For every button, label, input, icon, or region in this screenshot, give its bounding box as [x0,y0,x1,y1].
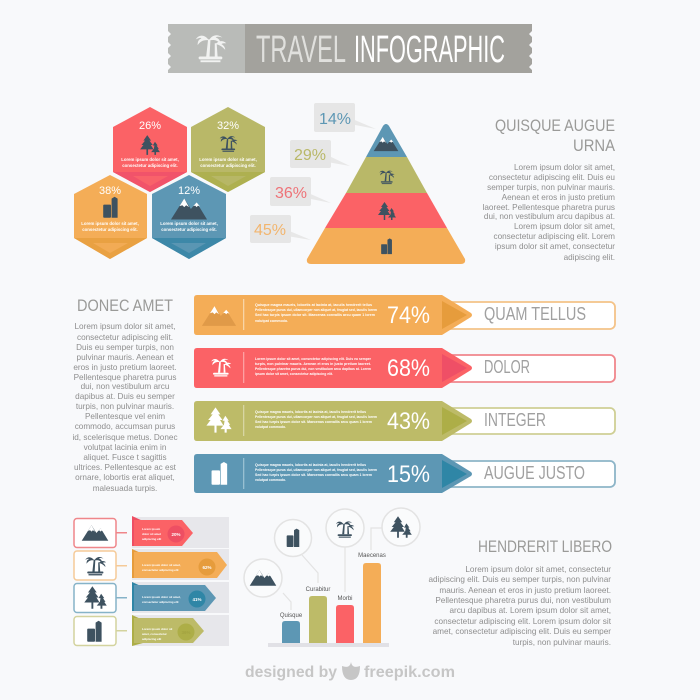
bar: orange 74% Quam Tellus: 74% [387,302,430,329]
bar: blue 15% Augue Justo: volutpat commodo. [255,477,286,482]
text block: Donec: consectetur adipiscing elit. [77,333,173,342]
bottom-left list row: buildings: 36% [181,630,191,635]
bar: blue 15% Augue Justo [194,454,615,493]
text block: Donec: aliquet. Fusce t sagittis [83,453,167,462]
hexagon: blue 12% [152,175,226,259]
text block: Quisque: laoreet. Pellentesque pharetra purus [483,203,615,212]
text block: Donec: Pellentesque vel enim [85,412,165,421]
text block: Donec: turpis, non pulvinar mauris. [76,402,174,411]
bar: Morbi [326,509,364,643]
bar: olive 43% Integer: INTEGER [484,410,546,430]
label: 45% [250,215,311,243]
icon: buildings [381,238,392,254]
bar: olive 43% Integer: Quisque magna mauris, lobortis at lacinia at, iaculis hendrerit tellus [255,409,367,414]
bottom-left list row: mountains [74,516,229,548]
heading: Hendrerit Libero: HENDRERIT LIBERO [478,537,612,556]
bottom-left list row: mountains: dolor sit amet [142,532,161,536]
bar: red 68% Dolor: 68% [387,355,430,382]
text block: Hendrerit: turpis, non pulvinar mauris. [513,638,611,647]
pyramid layer: red [325,193,447,228]
bar: Quisque [244,559,303,643]
bottom-left list row: trees: consectetur adipiscing elit [142,600,179,604]
bar: Quisque: Quisque [280,613,303,619]
bar: Morbi: Morbi [337,596,353,602]
bottom-left list row: buildings: adipiscing elit [142,637,161,641]
bar: orange 74% Quam Tellus: QUAM TELLUS [484,304,586,324]
title ribbon: INFOGRAPHIC [354,29,505,71]
hexagon: red 26%: Lorem ipsum dolor sit amet, [121,157,179,162]
title text: TRAVEL [256,29,346,71]
label: 36%: 36% [275,185,307,202]
bottom-left list row: mountains: 20% [171,532,181,537]
hexagon: blue 12%: 12% [178,185,200,197]
text block: Hendrerit: consectetur adipiscing elit. Lorem ipsum dolor sit [434,617,612,626]
bar: orange 74% Quam Tellus: Sed hac turpis ipsum dolor sit. Maecenas convallis arcu quam 1 lorem [255,312,375,317]
text block: Quisque: Lorem ipsum dolor sit amet, [514,222,615,231]
bottom-left list row: trees: 41% [192,597,202,602]
text block: Donec: ornare, lobortis erat aliquet, [75,473,175,482]
bar: orange 74% Quam Tellus: Quisque magna mauris, lobortis at lacinia at, iaculis hendrerit tellus [255,302,373,307]
bottom-left list row: trees [74,582,229,613]
bottom-left list row: palm [74,549,229,580]
bar: blue 15% Augue Justo: Sed hac turpis ipsum dolor sit. Maecenas convallis arcu quam 1 lorem [255,472,372,477]
bar: blue 15% Augue Justo: Pellentesque purus dui, ullamcorper non aliquet at, feugiat sed, iaculis lorem [255,467,377,472]
pyramid chart [307,124,465,264]
bar: orange 74% Quam Tellus [194,295,615,335]
text block: Hendrerit: mauris. Aenean et eros in justo pretium laoreet. [439,586,611,595]
bottom-left list row: buildings: Lorem ipsum dolor sit [142,627,172,631]
bar: blue 15% Augue Justo: Quisque magna mauris, lobortis at lacinia at, iaculis hendrerit tellus [255,462,367,467]
bar: Curabitur: Curabitur [306,587,330,593]
bar: Curabitur [274,520,330,643]
bottom-left list row: trees: Lorem ipsum dolor sit amet, [142,595,181,599]
text block: Quisque: consectetur adipiscing elit. Lorem [493,232,615,241]
heading: Donec Amet: DONEC AMET [77,296,173,315]
bottom-left list row: buildings: amet, consectetur [142,632,168,636]
bar: orange 74% Quam Tellus: Pellentesque purus dui, ullamcorper non aliquet at, feugiat sed, iaculis lorem [255,307,377,312]
text block: Quisque: dui, non vestibulum arcu dapibus at. [484,212,615,221]
text block: Hendrerit: arcu dapibus at. Lorem ipsum dolor sit amet, [449,606,611,615]
bar: red 68% Dolor: ipsum dolor sit amet, consectetur adipiscing elit. [255,371,333,376]
footer credit: designed by [245,664,337,681]
hexagon: red 26%: consectetur adipiscing elit. [122,163,178,168]
bar: red 68% Dolor [194,348,615,388]
text block: Donec: Duis eu semper turpis, non [76,343,174,352]
bar: blue 15% Augue Justo: AUGUE JUSTO [484,463,585,483]
text block: Quisque: Aenean et eros in justo pretium [502,193,615,202]
bar: olive 43% Integer: Pellentesque purus dui, ullamcorper non aliquet at, feugiat sed, iaculis lorem [255,414,377,419]
text block: Donec: pulvinar mauris. Aenean et [77,353,174,362]
hexagon: orange 38%: Lorem ipsum dolor sit amet, [81,221,139,226]
hexagon: orange 38% [74,175,147,259]
heading: Quisque Augue Urna [495,116,616,155]
text block: Donec: Pellentesque pharetra purus [74,373,176,382]
text block: Quisque: semper turpis, non pulvinar mauris. [487,183,615,192]
text block: Donec: dapibus at. Duis eu semper [75,392,175,401]
icon: trees [378,202,396,220]
text block: Donec: commodo, accumsan purus [75,422,175,431]
bottom-left list row: mountains: Lorem ipsum [142,527,161,531]
text block: Quisque: adipiscing elit. [564,253,615,262]
hexagon: red 26%: 26% [139,120,161,132]
text block: Hendrerit: amet, consectetur adipiscing elit. Duis eu semper [433,627,611,636]
text block: Donec: malesuada turpis. [93,484,157,493]
bottom-left list row: palm: Lorem ipsum dolor sit amet, [142,563,181,567]
pyramid layer: blue [366,124,407,157]
hexagon: blue 12%: consectetur adipiscing elit. [161,227,217,232]
bar: olive 43% Integer: 43% [387,408,430,435]
text block: Donec: volutpat lacinia enim in [84,443,167,452]
bar: Maecenas: Maecenas [358,553,386,559]
hexagon: olive 32%: Lorem ipsum dolor sit amet, [199,157,257,162]
footer credit [245,662,455,681]
hexagon: olive 32%: consectetur adipiscing elit. [200,163,256,168]
icon: mountains [374,137,398,151]
title ribbon [167,24,533,73]
bar: olive 43% Integer [194,401,615,441]
text block: Donec: eros in justo pretium laoreet. [73,363,177,372]
text block: Quisque: ipsum dolor sit amet, consectetur [495,242,615,251]
footer credit: freepik.com [364,664,455,681]
bottom-left list row: palm: 62% [202,565,212,570]
icon: palm [379,171,395,184]
text block: Quisque [483,163,615,262]
text block: Hendrerit: adipiscing elit. Duis eu semper turpis, non pulvinar [428,575,611,584]
hexagon: red 26% [113,107,187,192]
text block: Donec: id, scelerisque metus. Donec [72,433,178,442]
icon: freepik logo [342,662,360,680]
bar: orange 74% Quam Tellus: volutpat commodo. [255,318,288,323]
label: 45%: 45% [254,222,286,239]
text block: Donec: ultrices. Pellentesque ac est [74,463,177,472]
hexagon: olive 32% [191,107,265,192]
text block: Quisque: consectetur adipiscing elit. Duis eu [489,173,615,182]
heading: Quisque Augue Urna: URNA [573,136,616,155]
label: 14% [314,103,376,132]
bottom-left list row: buildings [74,615,229,646]
icon: palm island [196,35,226,62]
bar: red 68% Dolor: turpis, non pulvinar mauris. Aenean et eros in justo pretium laoreet. [255,361,371,366]
bottom-left list row: palm: consectetur adipiscing elit [142,568,179,572]
bar: olive 43% Integer: volutpat commodo. [255,424,286,429]
text block: Hendrerit: Pellentesque pharetra purus dui, non vestibulum [435,596,611,605]
pyramid layer: olive [346,157,427,193]
text block: Quisque: Lorem ipsum dolor sit amet, [514,163,615,172]
bar chart [244,508,420,647]
label: 36% [270,177,331,206]
bar: Maecenas [358,508,420,643]
pyramid layer: orange [307,228,465,264]
bottom-left list row: mountains: adipiscing elit [142,537,161,541]
hexagon: olive 32%: 32% [217,120,239,132]
bar: red 68% Dolor: DOLOR [484,357,530,377]
hexagon: orange 38%: consectetur adipiscing elit. [82,227,138,232]
label: 29% [290,140,350,168]
label: 29%: 29% [294,147,326,164]
bar: red 68% Dolor: Pellentesque pharetra purus dui, non vestibulum arcu dapibus at. Lorem [255,366,371,371]
text block: Donec [72,322,178,493]
hexagon: blue 12%: Lorem ipsum dolor sit amet, [160,221,218,226]
bar: red 68% Dolor: Lorem ipsum dolor sit amet, consectetur adipiscing elit. Duis eu semper [255,356,371,361]
text block: Hendrerit: Lorem ipsum dolor sit amet, consectetur [465,565,611,574]
bar: olive 43% Integer: Sed hac turpis ipsum dolor sit. Maecenas convallis arcu quam 1 lorem [255,419,372,424]
text block: Donec: Lorem ipsum dolor sit amet, [74,322,176,331]
text block: Donec: dui, non vestibulum arcu [81,382,170,391]
heading: Quisque Augue Urna: QUISQUE AUGUE [495,116,615,135]
hexagon: orange 38%: 38% [99,185,121,197]
bar: blue 15% Augue Justo: 15% [387,461,430,488]
text block: Hendrerit [428,565,612,647]
label: 14%: 14% [319,111,351,128]
